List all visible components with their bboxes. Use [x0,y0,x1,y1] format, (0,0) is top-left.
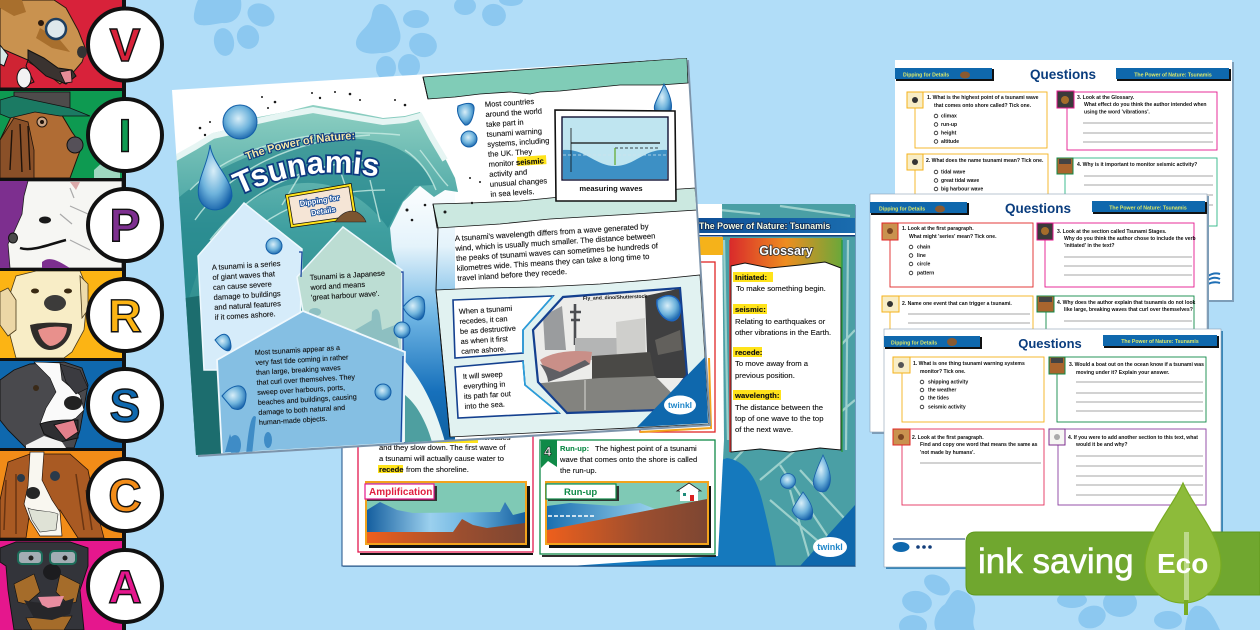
amplification text: and they slow down. The first wave of [379,443,506,452]
amplification text: increases [478,433,511,442]
question 3: 3. Look at the section called Tsunami Stages. [1057,229,1167,235]
question 4 [1057,158,1217,226]
seismic paragraph: unusual changes [490,176,548,189]
banner text: ink saving [978,542,1134,581]
question 2: great tidal wave [941,178,979,184]
header tags: Dipping for Details [879,206,925,212]
worksheet: questions page C [884,329,1223,569]
run-up text: Run-up: [560,444,589,453]
twinkl corner [637,357,708,427]
letter circle V: V [110,19,141,71]
foam crest [172,110,445,160]
seismic paragraph: in sea levels. [490,187,535,199]
question 3: moving under it? Explain your answer. [1076,370,1170,376]
wavelength paragraph: kilometres wide. This means they can take a long time to [456,252,650,273]
question 3 [1037,223,1196,287]
recede highlight: recede [379,465,404,474]
dipping for details plaque [287,185,366,226]
question 2: 'not made by humans'. [920,450,975,456]
glossary terms and definitions: The distance between the [735,403,823,412]
blue wave curve [560,458,776,566]
question 3: Why do you think the author chose to include the verb [1064,236,1196,242]
glossary header [730,238,842,270]
seismic paragraph: systems, including [487,136,550,149]
dipping for details plaque: Dipping for [299,193,340,208]
section heading strip [698,237,723,255]
question 1: seismic activity [928,404,966,410]
callout: when a tsunami recedes: as when it first [460,334,508,346]
band: V red dog [0,0,122,88]
house panel: most tsunamis: beaches and buildings, causing [258,393,357,407]
question 1: monitor? Tick one. [920,369,966,375]
mint band [433,188,697,228]
top teal strip [423,58,688,99]
twinkl corner: twinkl [668,400,692,410]
letter circle R: R [108,290,142,342]
letter circle S: S [110,380,140,432]
droplets on front page [198,84,671,409]
band: I green dog [0,91,122,178]
header tags: Dipping for Details [903,72,949,78]
heading: Questions [1005,201,1071,216]
wavelength paragraph: travel inland before they recede. [457,267,567,283]
house panel: what a tsunami is: A tsunami is a series [212,259,281,272]
dividers [0,0,126,630]
question 1 [907,92,1047,148]
question 2: Find and copy one word that means the same as [920,442,1038,448]
worksheet: questions page A [895,60,1234,302]
house panel: what a tsunami is: can cause severe [213,279,272,292]
header tags [895,68,1231,81]
question 4: 4. Why is it important to monitor seismic activity? [1077,162,1197,168]
question 1: shipping activity [928,380,968,386]
band: S blue dog [0,361,122,448]
house panel: what a tsunami is: damage to buildings [213,289,281,302]
question 1: run-up [941,122,957,128]
water droplets [780,455,830,520]
header band: The Power of Nature: Tsunamis [699,221,830,231]
red text box [640,262,715,432]
question 4: would it be and why? [1075,442,1128,448]
letter circle I [88,99,162,171]
seismic paragraph: monitor seismic [488,156,544,169]
wavelength paragraph: the peaks of tsunami waves can sometimes be hundreds of [456,241,659,263]
twinkl corner: twinkl [817,542,843,552]
house panel: Japanese word: Tsunami is a Japanese [310,269,385,282]
letter circle P [88,189,162,261]
seismic paragraph: tsunami warning [486,126,542,139]
house panel: Japanese word: 'great harbour wave'. [311,289,380,302]
house [677,483,701,501]
band: P purple dog [0,181,122,268]
question 1: height [941,130,957,136]
question 1: the tides [928,396,949,402]
panel: amplification [358,425,533,554]
teal wave background [722,204,855,566]
glossary terms and definitions: of the next wave. [735,425,793,434]
glossary terms and definitions: To make something begin. [736,284,826,293]
leaf drop [1145,483,1221,615]
run-up diagram: Run-up [564,487,597,498]
letter circle V [88,8,162,80]
house panel: most tsunamis: than large, breaking waves [256,364,341,377]
photo: tsunami damage street: Fly_and_dino/Shutterstock [583,294,647,302]
question 3 [1049,357,1206,422]
header tags: The Power of Nature: Tsunamis [1121,339,1199,345]
question 1: climax [941,114,957,120]
question 2 [882,296,1033,356]
house panel: what a tsunami is: if it comes ashore. [215,309,276,322]
dipping for details plaque: Details [310,205,336,217]
house panel: most tsunamis: that curl over themselves. They [256,373,356,387]
panel: glossary: Glossary [759,244,813,258]
question 4: like large, breaking waves that curl over themselves? [1064,307,1193,313]
letter circle A: A [108,560,142,612]
letter circle I: I [119,110,131,162]
question 2 [907,154,1048,214]
house panel: most tsunamis: Most tsunamis appear as a [255,344,340,357]
house panel: what a tsunami is: of giant waves that [212,269,276,282]
callout: it will sweep: its path far out [464,389,511,401]
droplet on photo [657,296,680,321]
wavelength paragraph: wind, which is usually much smaller. The distance between [454,231,656,253]
badge: ink saving eco [966,483,1260,615]
question 2: 2. What does the name tsunami mean? Tick one. [926,158,1044,164]
question 1: chain [917,244,930,250]
glossary terms and definitions: previous position. [735,371,795,380]
callout: when a tsunami recedes [453,296,553,358]
heading: Questions [1030,67,1096,82]
letter circle P: P [110,200,140,252]
header tags: The Power of Nature: Tsunamis [1134,72,1212,78]
house panel: what a tsunami is: and natural features [214,299,281,312]
worksheet: questions page B [870,194,1209,434]
panel: back page with glossary [342,204,856,567]
question 1: altitude [941,139,959,145]
footer twinkl logo [892,539,965,552]
question 1: pattern [917,270,934,276]
question 1: What might 'series' mean? Tick one. [909,234,997,240]
question 2: 2. Name one event that can trigger a tsunami. [902,301,1012,307]
question 3 [1057,91,1217,150]
house panel: what a tsunami is [198,203,302,370]
panel: glossary [730,238,842,452]
question 1: 1. Look at the first paragraph. [902,226,974,232]
measuring waves diagram: measuring waves [579,184,643,193]
seismic paragraph: Most countries [485,97,535,109]
twinkl corner [800,505,855,566]
callout: it will sweep: everything in [463,380,506,391]
question 3: What effect do you think the author intended when [1084,102,1207,108]
question 4: 4. Why does the author explain that tsunamis do not look [1057,300,1196,306]
header band [697,218,855,236]
amplification text: from the shoreline. [406,465,469,474]
callout: when a tsunami recedes: came ashore. [461,344,506,356]
title: The Power of Nature: [243,132,356,160]
question 2: big harbour wave [941,186,983,192]
header tags [870,201,1207,215]
callout: when a tsunami recedes: recedes, it can [459,314,508,326]
wavelength paragraph: A tsunami's wavelength differs from a wave generated by [455,222,649,243]
question 2 [893,429,1044,505]
house panel: most tsunamis: damage to both natural and [258,404,345,417]
twinkl mark [1208,273,1220,284]
question 1: circle [917,262,930,268]
run-up diagram [546,482,711,548]
seismic paragraph: the UK. They [488,147,533,159]
seismic paragraph: around the world [485,106,542,119]
spray dots [199,91,481,221]
measuring waves diagram [555,110,676,201]
callout: it will sweep [455,361,559,418]
house panel: most tsunamis [217,311,405,455]
seismic paragraph [485,96,553,199]
header tags [884,335,1219,349]
glossary terms and definitions: top of one wave to the top [735,414,823,423]
glossary terms and definitions: seismic: [735,305,766,314]
question 3: using the word 'vibrations'. [1084,110,1150,116]
main wave [172,105,458,460]
run-up text: the run-up. [560,466,597,475]
eco text: Eco [1157,548,1208,579]
run-up text: wave that comes onto the shore is called [559,455,697,464]
callout: it will sweep: It will sweep [463,370,503,381]
band: A pink dog [0,541,122,630]
white content area [342,204,724,566]
seismic paragraph: activity and [489,167,527,179]
house panel: most tsunamis: human-made objects. [259,415,327,427]
house panel: most tsunamis: sweep over harbours, ports, [257,384,345,397]
amplification diagram [365,482,530,548]
glossary terms and definitions: To move away from a [735,359,809,368]
question 4 [1037,296,1196,356]
band: C orange dog [0,451,122,538]
question 3: 'initiated' in the text? [1064,243,1115,249]
house panel: Japanese word [297,227,402,352]
question 4 [1049,429,1206,505]
number ribbon [541,440,557,468]
panel: front page tsunami leaflet [172,58,711,457]
question 1: the weather [928,388,956,394]
question 1: line [917,253,926,259]
house panel: most tsunamis: very fast tide coming in rather [255,353,349,367]
callout: it will sweep: into the sea. [464,400,505,411]
band: R yellow dog [0,271,122,358]
gulf gradient behind wave [390,200,455,443]
callout: when a tsunami recedes: be as destructive [460,324,516,336]
heading: Questions [1018,336,1082,351]
letter circle C: C [108,470,142,522]
photo: tsunami damage street [530,285,690,420]
run-up text: The highest point of a tsunami [595,444,697,453]
callout: when a tsunami recedes: When a tsunami [459,304,513,316]
panel: run-up [540,440,716,556]
question 1 [893,357,1044,422]
header tags: The Power of Nature: Tsunamis [1109,206,1187,212]
question 1: that comes onto shore called? Tick one. [934,103,1032,109]
seismic paragraph: take part in [486,118,524,129]
glossary terms and definitions: Initiated: [735,273,767,282]
letter circle C [88,459,162,531]
glossary terms and definitions: wavelength: [734,391,779,400]
orange frame behind front page [640,358,711,432]
question 1 [882,223,1033,287]
letter circle A [88,550,162,622]
lower mint section [436,275,709,437]
amplification diagram: Amplification [369,487,432,498]
panel: dog character strip [0,0,162,630]
glossary highlights [733,272,781,400]
letter circle S [88,369,162,441]
question 4: 4. If you were to add another section to this text, what [1068,435,1198,441]
foam bottom right [402,358,445,442]
question 1: 1. What is one thing tsunami warning systems [913,361,1025,367]
question 3: 3. Would a boat out on the ocean know if a tsunami was [1069,362,1204,368]
question 1: 1. What is the highest point of a tsunami wave [927,95,1039,101]
number ribbon: 4 [544,444,552,459]
question 2: 2. Look at the first paragraph. [912,435,984,441]
glossary terms and definitions: Relating to earthquakes or [735,317,826,326]
amplification text: a tsunami will actually cause water to [379,454,504,463]
glossary terms and definitions: other vibrations in the Earth. [735,328,831,337]
question 3: 3. Look at the Glossary. [1077,95,1135,101]
title: Tsunamis [228,149,380,194]
house panel: Japanese word: word and means [309,280,366,292]
glossary terms and definitions: recede: [735,348,762,357]
question 2: tidal wave [941,170,966,176]
letter circle R [88,279,162,351]
banner [966,532,1260,595]
header tags: Dipping for Details [891,340,937,346]
